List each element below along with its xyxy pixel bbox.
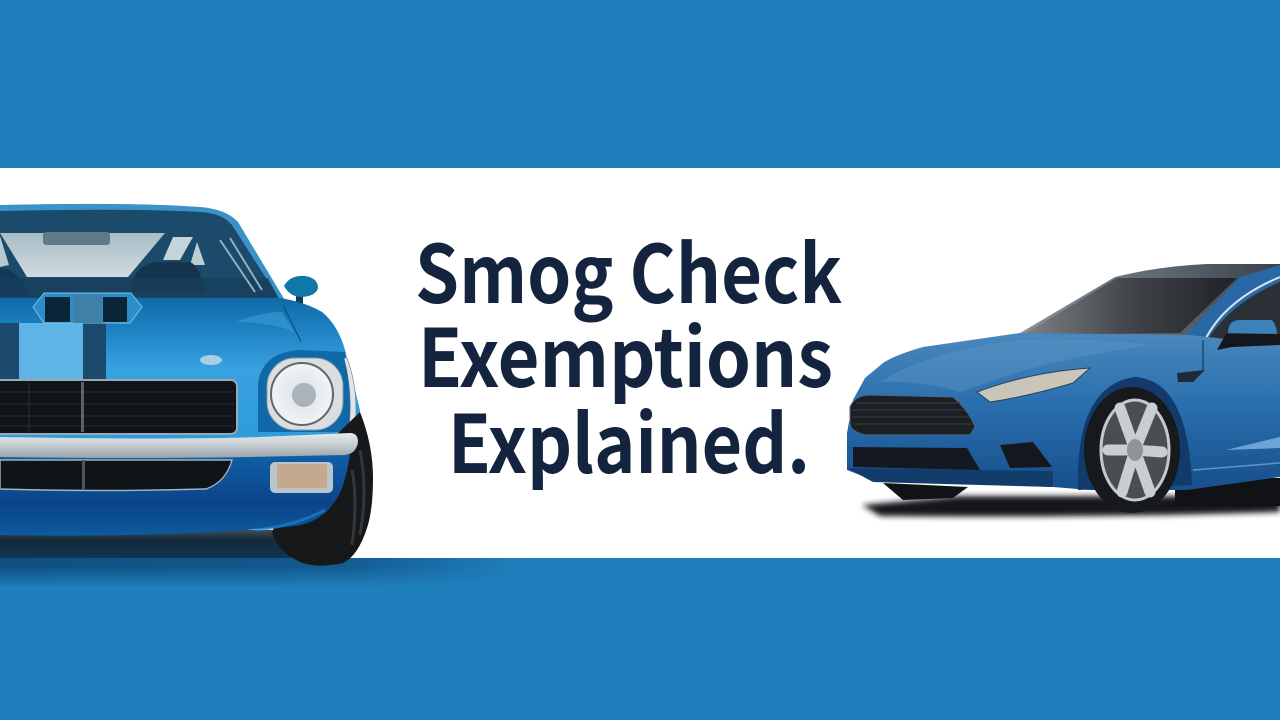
lower grille xyxy=(0,460,232,490)
fog vent xyxy=(1000,442,1052,468)
front grille xyxy=(850,395,975,435)
front wheel xyxy=(1084,387,1180,513)
title xyxy=(415,211,842,497)
hood scoop xyxy=(33,293,142,323)
title: Explained. xyxy=(448,381,810,497)
classic car side mirror xyxy=(284,276,318,304)
hood badge xyxy=(200,355,222,365)
modern car ground shadow xyxy=(862,478,1280,516)
lower intake xyxy=(853,447,980,470)
side sill xyxy=(1193,463,1280,470)
hood crease xyxy=(235,312,300,342)
turn signal xyxy=(270,462,333,493)
grille xyxy=(0,380,237,434)
racing stripes xyxy=(0,323,106,379)
headlight surround xyxy=(258,350,358,432)
hood highlight xyxy=(880,340,1150,392)
hood light panel xyxy=(19,323,83,379)
door highlight xyxy=(1226,437,1280,450)
top blue band xyxy=(0,0,1280,168)
round headlight xyxy=(267,358,343,430)
fender marker xyxy=(1177,370,1205,382)
classic car ground shadow xyxy=(0,530,520,588)
classic car body xyxy=(0,298,360,440)
chin splitter xyxy=(847,468,1053,487)
chrome bumper xyxy=(0,433,358,458)
fender chrome trim xyxy=(344,358,356,428)
bottom blue band xyxy=(0,558,1280,720)
headlight xyxy=(977,368,1090,402)
modern car roof and windows xyxy=(1015,264,1280,345)
side mirror xyxy=(1217,320,1280,350)
classic blue muscle car xyxy=(0,204,373,566)
door seam xyxy=(1202,340,1204,370)
tire xyxy=(272,412,373,566)
lower valance xyxy=(0,455,350,536)
title: Exemptions xyxy=(418,295,833,411)
modern car body xyxy=(847,333,1280,490)
classic car roof and windshield xyxy=(0,204,286,302)
wheel arch xyxy=(1078,377,1192,490)
title: Smog Check xyxy=(415,211,842,327)
front tire under bumper xyxy=(883,483,968,500)
white center panel xyxy=(0,168,1280,558)
modern blue electric car xyxy=(847,264,1280,516)
